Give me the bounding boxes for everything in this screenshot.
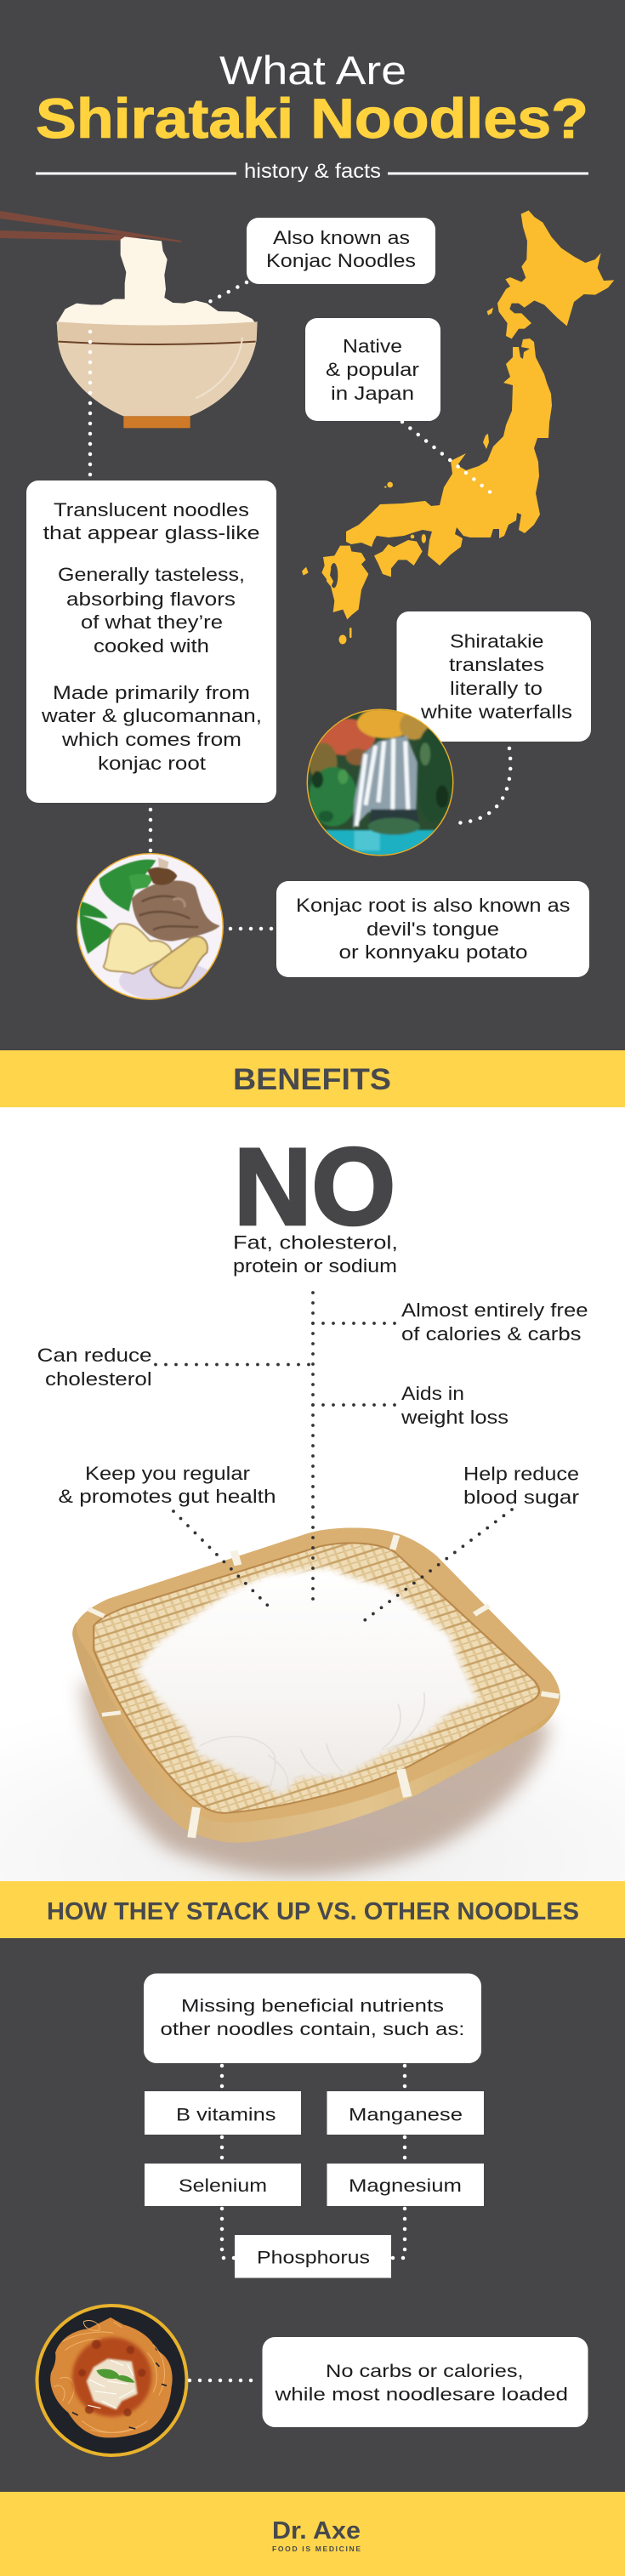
panel: benefits xyxy=(0,1107,625,1882)
connector: bowl to also-known-as card xyxy=(209,282,247,302)
callout: no carbs or calories: No carbs or calories, xyxy=(326,2362,524,2381)
title line: What Are: What Are xyxy=(219,48,406,93)
panel: noodle description card xyxy=(26,481,276,803)
title block xyxy=(36,48,588,183)
text: made from xyxy=(41,682,262,774)
callout: konjac root names xyxy=(276,881,589,977)
basket body xyxy=(72,1527,560,1843)
callout: konjac root names: Konjac root is also known as xyxy=(296,895,570,916)
footer: Dr. Axe logo xyxy=(0,2492,625,2576)
text: fat, cholesterol, protein or sodium xyxy=(233,1231,398,1277)
icon: bowl foot xyxy=(123,416,190,428)
connector: right nutrient column xyxy=(391,2066,405,2258)
nutrient: B vitamins: B vitamins xyxy=(176,2106,276,2124)
image: konjac root xyxy=(77,853,224,1001)
connector: pasta to callout xyxy=(190,2379,261,2382)
woven mat xyxy=(94,1543,539,1813)
callout: native and popular xyxy=(305,318,440,421)
connector: konjac image to konjac card xyxy=(230,927,276,930)
text: tasteless: of what they’re xyxy=(81,611,223,633)
subtitle: history & facts xyxy=(244,160,381,183)
benefit: almost free of calories and carbs: Almost entirely free xyxy=(401,1299,588,1321)
callout: waterfalls translation: translates xyxy=(449,654,544,675)
connector: waterfall to waterfall card xyxy=(451,748,510,823)
basket shadow xyxy=(82,1681,548,1875)
benefit: can reduce cholesterol: cholesterol xyxy=(45,1368,152,1390)
nutrient: Phosphorus: Phosphorus xyxy=(257,2249,370,2268)
callout: also known as: Also known as xyxy=(273,227,410,248)
panel: comparison xyxy=(36,1973,588,2457)
connector: to weight loss xyxy=(313,1403,395,1407)
connector: central dotted line xyxy=(311,1293,315,1601)
text: translucent: that appear glass-like xyxy=(43,522,260,543)
callout: waterfalls translation: white waterfalls xyxy=(420,702,572,723)
nutrient: Selenium xyxy=(145,2164,301,2206)
section banner: benefits xyxy=(0,1050,625,1107)
image: waterfall xyxy=(306,708,454,858)
section banner: how they stack up xyxy=(0,1881,625,1938)
callout: no carbs or calories: while most noodlesare loaded xyxy=(274,2385,568,2405)
title line: Shirataki Noodles: Shirataki Noodles? xyxy=(36,87,588,150)
benefit: almost free of calories and carbs xyxy=(401,1299,588,1345)
nutrient: Phosphorus xyxy=(235,2235,391,2277)
nutrient: Selenium: Selenium xyxy=(179,2176,267,2196)
nutrient: Manganese: Manganese xyxy=(349,2106,463,2124)
connector: left nutrient column xyxy=(222,2066,235,2258)
text: made from: konjac root xyxy=(98,753,206,774)
benefit: aids in weight loss xyxy=(401,1383,509,1428)
benefit: help reduce blood sugar: Help reduce xyxy=(463,1463,579,1485)
callout: also known as xyxy=(247,218,435,284)
callout: waterfalls translation: literally to xyxy=(450,678,543,699)
callout: native and popular: Native xyxy=(343,335,402,357)
text: translucent: Translucent noodles xyxy=(54,499,249,520)
connector: to gut health xyxy=(173,1511,268,1606)
text: translucent xyxy=(43,499,260,543)
callout: missing nutrients: Missing beneficial nutrients xyxy=(181,1997,444,2016)
benefit: keep you regular: & promotes gut health xyxy=(58,1486,276,1507)
basket rim xyxy=(77,1527,560,1823)
connector: card to konjac image xyxy=(149,810,152,852)
image: pasta plate xyxy=(36,2304,189,2457)
panel: history and facts background xyxy=(0,0,625,1051)
icon: noodles lifted from bowl xyxy=(57,236,257,329)
nutrient: Magnesium xyxy=(327,2164,484,2206)
connector: to free of calories xyxy=(313,1322,395,1325)
benefit: can reduce cholesterol xyxy=(37,1345,152,1390)
text: tasteless: cooked with xyxy=(94,635,209,657)
icon: bowl of noodles with chopsticks xyxy=(0,211,258,428)
heading: NO: NO xyxy=(234,1126,395,1248)
icon: bowl body xyxy=(57,321,258,416)
callout: native and popular: & popular xyxy=(326,359,419,380)
connector: to reduce cholesterol xyxy=(156,1363,313,1366)
icon: chopsticks xyxy=(0,211,181,242)
benefit: help reduce blood sugar: blood sugar xyxy=(463,1487,579,1508)
callout: konjac root names: devil's tongue xyxy=(366,918,499,940)
benefit: keep you regular: Keep you regular xyxy=(85,1463,250,1484)
benefit: help reduce blood sugar xyxy=(463,1463,579,1508)
footer: Dr. Axe logo: FOOD IS MEDICINE xyxy=(272,2545,361,2553)
section banner: how they stack up: HOW THEY STACK UP VS. OTHER NOODLES xyxy=(47,1898,579,1925)
section banner: benefits: BENEFITS xyxy=(233,1063,391,1096)
benefit: almost free of calories and carbs: of calories & carbs xyxy=(401,1323,582,1345)
benefit: keep you regular xyxy=(58,1463,276,1507)
callout: native and popular: in Japan xyxy=(331,383,414,404)
text: fat, cholesterol, protein or sodium: protein or sodium xyxy=(233,1255,397,1277)
text: tasteless xyxy=(58,564,245,657)
text: made from: Made primarily from xyxy=(53,682,250,703)
callout: no carbs or calories xyxy=(262,2337,588,2427)
callout: waterfalls translation xyxy=(396,611,591,742)
callout: missing nutrients xyxy=(144,1973,481,2063)
footer: Dr. Axe logo: Dr. Axe xyxy=(272,2517,361,2545)
text: tasteless: absorbing flavors xyxy=(66,589,236,610)
image: basket of shirataki noodles xyxy=(72,1527,560,1875)
basket ties xyxy=(87,1534,560,1838)
benefit: aids in weight loss: Aids in xyxy=(401,1383,464,1404)
text: made from: water & glucomannan, xyxy=(41,705,262,726)
connector: bowl to description card xyxy=(88,332,92,478)
benefit: aids in weight loss: weight loss xyxy=(401,1407,509,1428)
text: made from: which comes from xyxy=(61,729,241,750)
map: Japan xyxy=(302,210,614,645)
callout: konjac root names: or konnyaku potato xyxy=(338,941,527,963)
callout: waterfalls translation: Shiratakie xyxy=(450,631,544,651)
connector: card to Japan map xyxy=(402,422,491,493)
noodle pile xyxy=(136,1567,480,1796)
connector: to blood sugar xyxy=(365,1510,512,1620)
callout: also known as: Konjac Noodles xyxy=(266,250,416,271)
nutrient: B vitamins xyxy=(145,2091,301,2135)
callout: missing nutrients: other noodles contain, such as: xyxy=(160,2020,464,2039)
text: fat, cholesterol, protein or sodium: Fat, cholesterol, xyxy=(233,1231,398,1254)
nutrient: Magnesium: Magnesium xyxy=(349,2176,462,2196)
benefit: can reduce cholesterol: Can reduce xyxy=(37,1345,152,1366)
text: tasteless: Generally tasteless, xyxy=(58,564,245,585)
nutrient: Manganese xyxy=(327,2091,484,2135)
